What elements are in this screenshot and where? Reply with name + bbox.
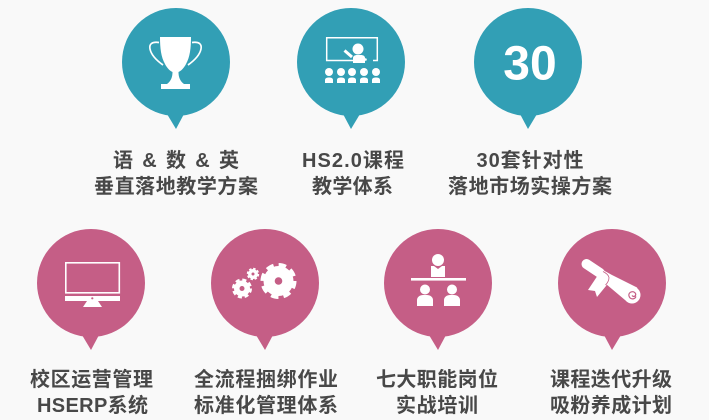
panel: job role training — [376, 229, 498, 417]
pin: trophy — [122, 8, 230, 129]
icon: trophy — [150, 37, 201, 89]
panel: HS2.0 curriculum — [297, 8, 405, 198]
number 30: 30 — [503, 38, 557, 90]
label: language and math program — [94, 149, 258, 198]
icon: gears — [234, 265, 294, 297]
pin: monitor — [37, 229, 145, 350]
panel: campus management system — [30, 229, 153, 417]
label: standard workflow — [194, 367, 338, 417]
icon: diploma — [586, 264, 640, 304]
label: language and math program: 垂直落地教学方案 — [94, 174, 258, 198]
label: HS2.0 curriculum: 教学体系 — [312, 175, 393, 198]
pin: gears — [211, 229, 319, 350]
pin: number 30 — [474, 8, 582, 129]
label: job role training: 实战培训 — [396, 393, 478, 417]
panel: language and math program — [94, 8, 258, 198]
panel: course iteration plan — [550, 229, 672, 417]
panel: standard workflow — [194, 229, 338, 417]
label: job role training — [376, 367, 498, 417]
pin: org chart — [384, 229, 492, 350]
pin: classroom — [297, 8, 405, 129]
icon: org chart — [411, 254, 466, 306]
label: standard workflow: 标准化管理体系 — [194, 394, 338, 417]
label: campus management system: 校区运营管理 — [30, 367, 153, 391]
label: HS2.0 curriculum: HS2.0课程 — [302, 149, 404, 172]
label: standard workflow: 全流程捆绑作业 — [194, 367, 338, 391]
label: course iteration plan: 课程迭代升级 — [550, 368, 672, 391]
icon: monitor — [65, 263, 120, 307]
label: campus management system — [30, 367, 153, 417]
label: 30 marketing plans: 落地市场实操方案 — [448, 174, 612, 198]
icon: classroom — [325, 38, 380, 83]
pin: diploma — [558, 229, 666, 350]
label: HS2.0 curriculum — [302, 149, 404, 198]
label: job role training: 七大职能岗位 — [376, 367, 498, 391]
label: course iteration plan — [550, 368, 672, 417]
label: 30 marketing plans: 30套针对性 — [476, 149, 584, 172]
label: campus management system: HSERP系统 — [37, 393, 148, 417]
label: language and math program: 语 & 数 & 英 — [113, 149, 239, 172]
panel: 30 marketing plans — [448, 8, 612, 198]
label: 30 marketing plans — [448, 149, 612, 198]
label: course iteration plan: 吸粉养成计划 — [550, 393, 672, 417]
